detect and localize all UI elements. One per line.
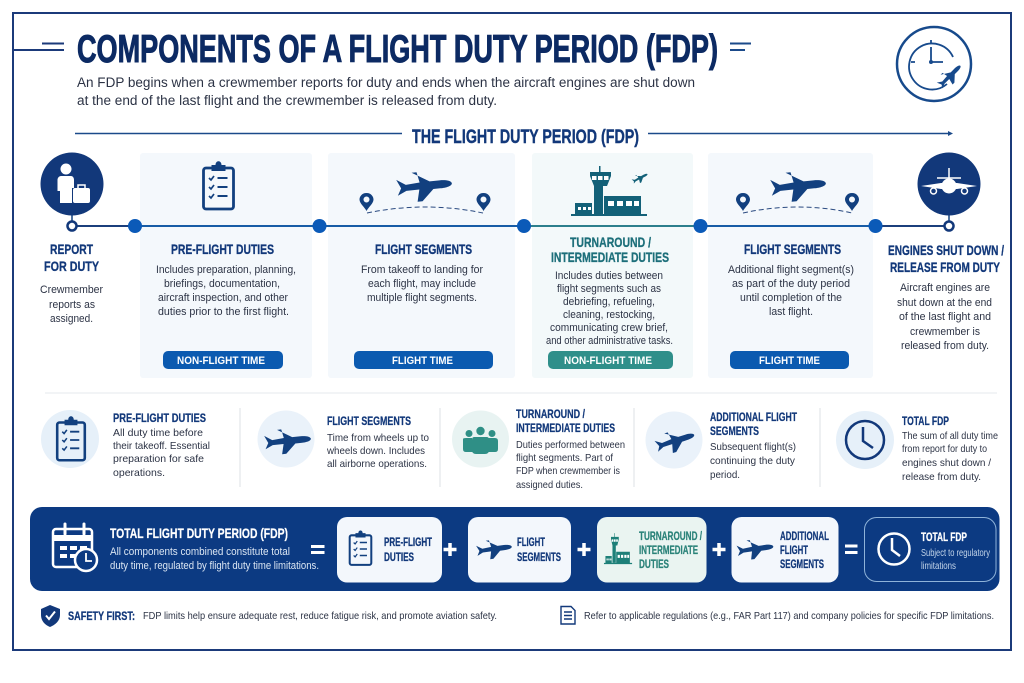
banner description: [110, 546, 319, 572]
description: debriefing, refueling,: [563, 296, 655, 308]
card: turnaround / intermediate duties: [597, 517, 706, 582]
icon: document: [561, 606, 575, 624]
icon: plane route: [360, 169, 490, 213]
banner description: duty time, regulated by flight duty time limitations.: [110, 560, 319, 572]
heading: INTERMEDIATE DUTIES: [551, 249, 669, 265]
heading: REPORT: [50, 241, 93, 257]
icon: control tower: [571, 166, 650, 216]
heading: [551, 234, 669, 265]
description: Time from wheels up to: [327, 432, 429, 444]
icon: clock: [836, 411, 894, 469]
icon: plane: [258, 410, 314, 468]
plus sign: [444, 543, 456, 556]
heading: TURNAROUND /: [570, 234, 651, 250]
title accent left: [13, 44, 64, 50]
description: Aircraft engines are: [900, 282, 990, 294]
equals sign: [845, 546, 858, 552]
icon: aircraft front view: [918, 152, 980, 216]
description: and other administrative tasks.: [546, 335, 673, 347]
icon: clock with plane: [897, 27, 971, 101]
card: flight segments: SEGMENTS: [517, 552, 561, 564]
badge: non-flight time: NON-FLIGHT TIME: [177, 355, 265, 367]
description: FDP when crewmember is: [516, 465, 620, 477]
badge: flight time: [354, 351, 493, 369]
description: [326, 432, 429, 470]
icon: shield: [41, 605, 60, 627]
description: preparation for safe: [113, 453, 204, 465]
footer: regulations note: [561, 606, 994, 624]
label: SAFETY FIRST:: [68, 609, 135, 623]
icon: calendar with clock: [53, 524, 97, 571]
description: From takeoff to landing for: [361, 264, 483, 276]
plus sign: [578, 543, 590, 556]
section heading: the flight duty period: THE FLIGHT DUTY PERIOD (FDP): [412, 127, 639, 148]
description: [546, 270, 673, 347]
summary: total FDP: [836, 411, 998, 483]
heading: PRE-FLIGHT DUTIES: [171, 241, 274, 257]
description: Includes preparation, planning,: [156, 264, 296, 276]
description: their takeoff. Essential: [113, 440, 210, 452]
panel: additional flight segments: [708, 153, 873, 378]
card: flight segments: [468, 517, 571, 582]
description: Duties performed between: [516, 439, 625, 451]
section heading: the flight duty period: [75, 127, 953, 148]
title: COMPONENTS OF A FLIGHT DUTY PERIOD (FDP): [77, 28, 718, 71]
summary: pre-flight duties: [41, 410, 210, 479]
card: additional flight segments: ADDITIONAL: [780, 531, 829, 543]
heading: PRE-FLIGHT DUTIES: [113, 411, 206, 425]
description: operations.: [113, 467, 165, 479]
heading: [516, 407, 615, 435]
panel: flight segments: [328, 153, 515, 378]
badge: flight time: FLIGHT TIME: [392, 355, 453, 367]
heading: SEGMENTS: [710, 424, 759, 438]
description: released from duty.: [901, 340, 989, 352]
description: wheels down. Includes: [326, 445, 425, 457]
description: from report for duty to: [902, 443, 987, 455]
summary: turnaround / intermediate duties: [452, 407, 625, 491]
panel: pre-flight duties: [140, 153, 312, 378]
heading: FLIGHT SEGMENTS: [375, 241, 472, 257]
description: cleaning, restocking,: [563, 309, 655, 321]
card: total FDP: limitations: [921, 561, 956, 572]
heading: [44, 241, 100, 274]
description: briefings, documentation,: [164, 278, 280, 290]
description: continuing the duty: [710, 455, 796, 467]
card: additional flight segments: [732, 517, 838, 582]
heading: FOR DUTY: [44, 258, 100, 274]
icon: plane route: [736, 169, 859, 213]
description: [361, 264, 483, 304]
description: [728, 264, 854, 318]
header: [13, 28, 751, 108]
description: assigned duties.: [516, 479, 583, 491]
intro text: at the end of the last flight and the crewmember is released from duty.: [77, 93, 497, 108]
footer: safety first note: [41, 605, 497, 627]
card: total FDP: TOTAL FDP: [921, 530, 967, 544]
title accent right: [730, 44, 751, 50]
heading: [888, 242, 1004, 275]
step: report for duty: [40, 152, 104, 325]
intro text: An FDP begins when a crewmember reports for duty and ends when the aircraft engines are shut down: [77, 75, 695, 90]
description: engines shut down /: [902, 457, 991, 469]
card: turnaround / intermediate duties: INTERMEDIATE: [639, 545, 698, 557]
description: each flight, may include: [368, 278, 476, 290]
description: flight segments such as: [557, 283, 661, 295]
description: [40, 284, 103, 325]
summary: additional flight segments: [646, 410, 797, 481]
description: [516, 439, 625, 491]
description: flight segments. Part of: [516, 452, 613, 464]
plus sign: [712, 543, 726, 556]
card: pre-flight duties: PRE-FLIGHT: [384, 537, 432, 549]
card: turnaround / intermediate duties: DUTIES: [639, 559, 669, 571]
description: Subsequent flight(s): [710, 441, 796, 453]
card: pre-flight duties: [337, 517, 442, 582]
description: of the last flight and: [899, 311, 991, 323]
badge: flight time: FLIGHT TIME: [759, 355, 820, 367]
description: as part of the duty period: [732, 278, 850, 290]
card: pre-flight duties: DUTIES: [384, 552, 414, 564]
description: All duty time before: [113, 427, 203, 439]
description: until completion of the: [740, 292, 842, 304]
description: Additional flight segment(s): [728, 264, 854, 276]
description: Includes duties between: [555, 270, 663, 282]
card: flight segments: FLIGHT: [517, 537, 545, 549]
description: shut down at the end: [897, 297, 992, 309]
timeline: [68, 212, 954, 233]
step: engines shut down / release from duty: [888, 152, 1004, 352]
badge: non-flight time: [163, 351, 283, 369]
description: reports as: [49, 299, 95, 311]
icon: clipboard: [41, 410, 99, 468]
description: [156, 264, 296, 318]
description: period.: [710, 469, 740, 481]
description: The sum of all duty time: [902, 430, 998, 442]
description: last flight.: [769, 306, 813, 318]
description: [113, 427, 210, 479]
description: all airborne operations.: [327, 458, 427, 470]
equals sign: [311, 546, 324, 552]
description: communicating crew brief,: [550, 322, 668, 334]
badge: flight time: [730, 351, 849, 369]
heading: TOTAL FDP: [902, 414, 949, 428]
icon: plane: [646, 412, 702, 468]
description: [897, 282, 992, 352]
summary: flight segments: [258, 410, 429, 470]
heading: FLIGHT SEGMENTS: [744, 241, 841, 257]
card: turnaround / intermediate duties: TURNAROUND /: [639, 531, 703, 543]
heading: INTERMEDIATE DUTIES: [516, 421, 615, 435]
text: FDP limits help ensure adequate rest, reduce fatigue risk, and promote aviation safety.: [143, 610, 497, 622]
badge: non-flight time: [548, 351, 673, 369]
description: assigned.: [50, 313, 93, 325]
card: total FDP: [864, 518, 996, 582]
icon: crewmember with suitcase: [40, 152, 104, 216]
banner: total flight duty period equation: [30, 507, 1000, 591]
panel: turnaround / intermediate duties: [532, 153, 693, 378]
icon: clipboard: [204, 161, 234, 209]
badge: non-flight time: NON-FLIGHT TIME: [564, 355, 652, 367]
description: [902, 430, 998, 483]
description: multiple flight segments.: [367, 292, 477, 304]
card: total FDP: Subject to regulatory: [921, 548, 990, 559]
heading: [710, 410, 797, 438]
description: crewmember is: [910, 326, 980, 338]
intro text: [77, 75, 695, 108]
icon: crew group: [452, 410, 509, 468]
banner heading: TOTAL FLIGHT DUTY PERIOD (FDP): [110, 525, 288, 541]
heading: ADDITIONAL FLIGHT: [710, 410, 797, 424]
banner description: All components combined constitute total: [110, 546, 290, 558]
card: additional flight segments: SEGMENTS: [780, 559, 824, 571]
heading: TURNAROUND /: [516, 407, 585, 421]
description: [710, 441, 796, 481]
description: aircraft inspection, and other: [158, 292, 288, 304]
description: Crewmember: [40, 284, 103, 296]
description: release from duty.: [902, 471, 981, 483]
card: additional flight segments: FLIGHT: [780, 545, 808, 557]
description: duties prior to the first flight.: [158, 306, 289, 318]
heading: FLIGHT SEGMENTS: [327, 414, 411, 428]
